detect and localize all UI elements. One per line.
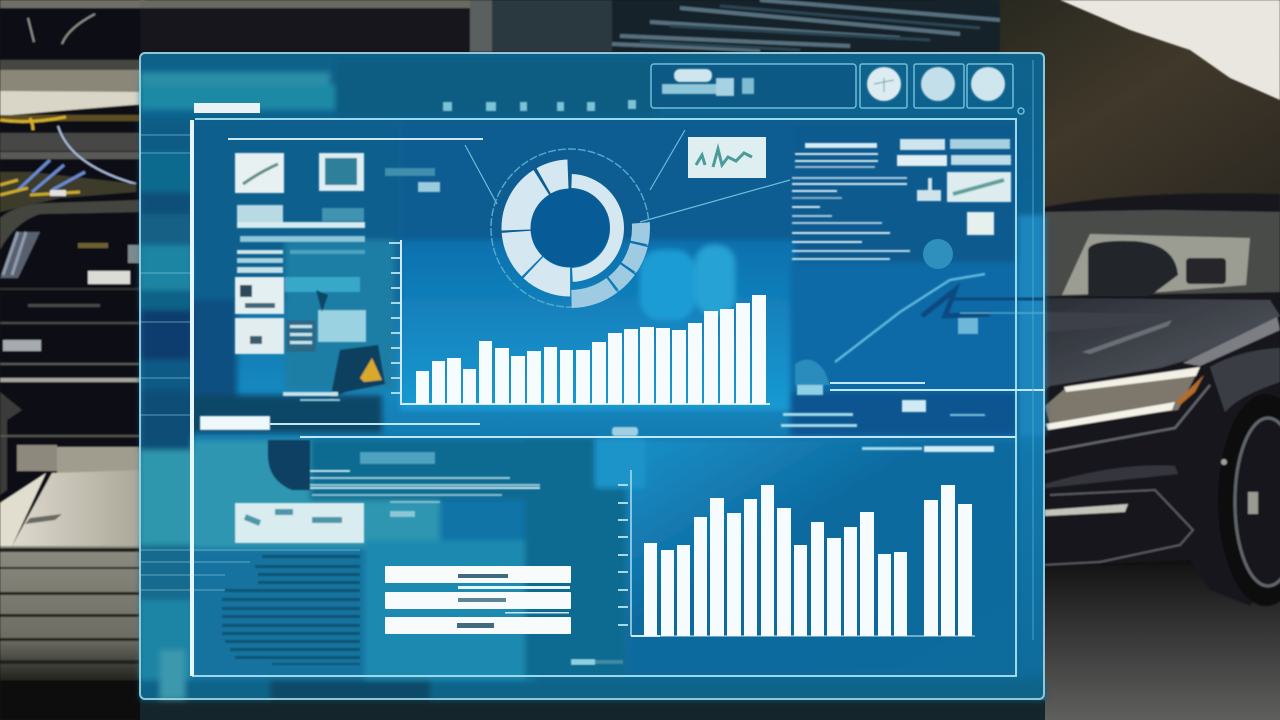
panel background bands bbox=[140, 60, 1045, 700]
top bar chart bbox=[389, 240, 770, 404]
lower left text block bbox=[222, 555, 360, 665]
three white data rows bbox=[385, 566, 571, 634]
upper thin line bbox=[228, 138, 483, 140]
header logo blob bbox=[662, 69, 754, 96]
right text block bbox=[792, 143, 910, 260]
axis bbox=[401, 240, 770, 404]
car ghost: windshield line bbox=[835, 274, 1045, 362]
thumbnail: trend image bbox=[688, 137, 766, 178]
connector lines bbox=[465, 130, 790, 222]
bottom tag bbox=[571, 659, 623, 665]
car ghost: mirror bbox=[795, 360, 830, 395]
right small tiles bbox=[897, 139, 1011, 235]
donut chart bbox=[491, 149, 649, 307]
bottom bar chart bbox=[618, 470, 975, 636]
grille slat bbox=[1045, 465, 1178, 488]
photo: sky and tunnel top right bbox=[940, 0, 1280, 215]
windshield bbox=[1045, 210, 1280, 296]
headlight bbox=[1045, 367, 1200, 425]
car roof and body bbox=[1040, 193, 1280, 606]
bars bbox=[416, 295, 766, 404]
top header boxes bbox=[651, 60, 1033, 640]
panel stripes left bbox=[140, 135, 360, 590]
car ghost: wheel overlay bbox=[268, 440, 310, 490]
top mini tick labels bbox=[443, 100, 636, 111]
mid labels bbox=[200, 400, 994, 464]
bumper crease bbox=[1045, 385, 1210, 452]
photo: left factory scene bbox=[0, 0, 145, 720]
top label tab bbox=[194, 103, 260, 113]
mid text block bbox=[310, 470, 540, 517]
panel border bbox=[140, 53, 1044, 699]
left thumbnails bbox=[235, 153, 440, 401]
dashboard panel bbox=[140, 52, 1045, 700]
fender bbox=[1210, 348, 1280, 412]
photo: bottom strip bbox=[140, 700, 1045, 720]
photo: top strip bbox=[140, 0, 1000, 52]
photo: road bbox=[1040, 565, 1280, 720]
header circle icons bbox=[867, 67, 1005, 101]
inner frame bbox=[192, 119, 1016, 676]
horizontal dividers bbox=[270, 383, 1045, 437]
panel base bbox=[140, 52, 1045, 700]
photo: dark car at right bbox=[1040, 193, 1280, 606]
front wheel bbox=[1218, 394, 1280, 606]
hood bbox=[1045, 298, 1280, 390]
thumbnail: key image bbox=[235, 503, 364, 543]
